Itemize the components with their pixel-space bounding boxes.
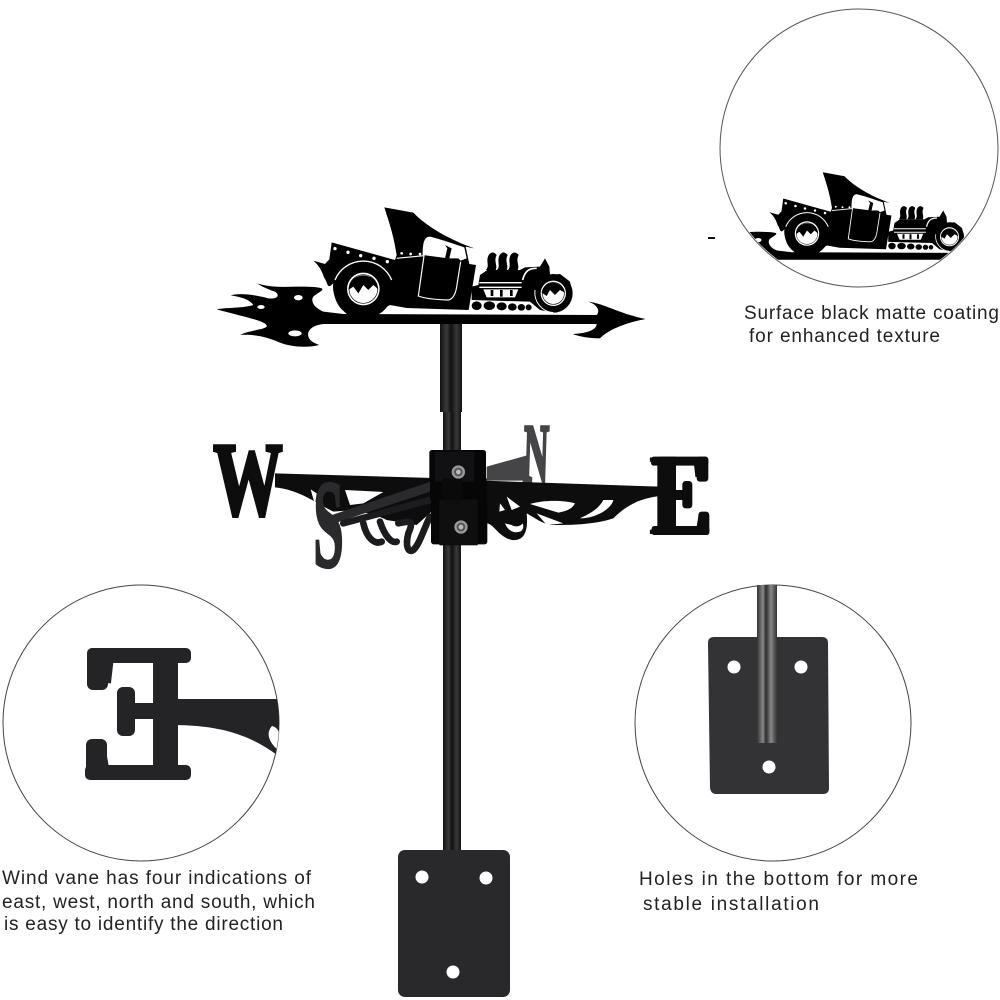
caption: mounting holes: stable installation <box>643 894 819 915</box>
caption: directions: east, west, north and south, which <box>2 892 315 913</box>
north arm: N <box>522 407 550 500</box>
main vane rod <box>440 322 462 850</box>
caption: directions: Wind vane has four indications of <box>2 868 312 889</box>
caption: matte coating <box>744 303 999 347</box>
caption: directions: is easy to identify the direction <box>4 914 283 935</box>
north arm <box>487 407 550 500</box>
car and arrow weather vane top <box>217 207 646 347</box>
detail circle: east letter <box>3 585 285 861</box>
detail circle: east letter: E <box>90 605 192 822</box>
compass cross arms <box>213 407 709 594</box>
clamp blocks with bolts <box>429 450 487 545</box>
west arm <box>213 424 433 538</box>
east arm: E <box>648 432 707 560</box>
caption: mounting holes <box>639 869 918 915</box>
east arm <box>483 432 709 560</box>
west arm: W <box>213 424 283 538</box>
caption: mounting holes: Holes in the bottom for more <box>639 869 918 890</box>
south arm: S <box>313 455 344 594</box>
detail circle: matte coating <box>697 9 1000 287</box>
caption: matte coating: Surface black matte coating <box>744 303 999 324</box>
south arm <box>313 455 435 594</box>
caption: matte coating: for enhanced texture <box>749 326 940 347</box>
caption: directions <box>2 868 315 935</box>
mounting base plate <box>398 850 510 997</box>
detail circle: mounting holes <box>635 585 911 861</box>
